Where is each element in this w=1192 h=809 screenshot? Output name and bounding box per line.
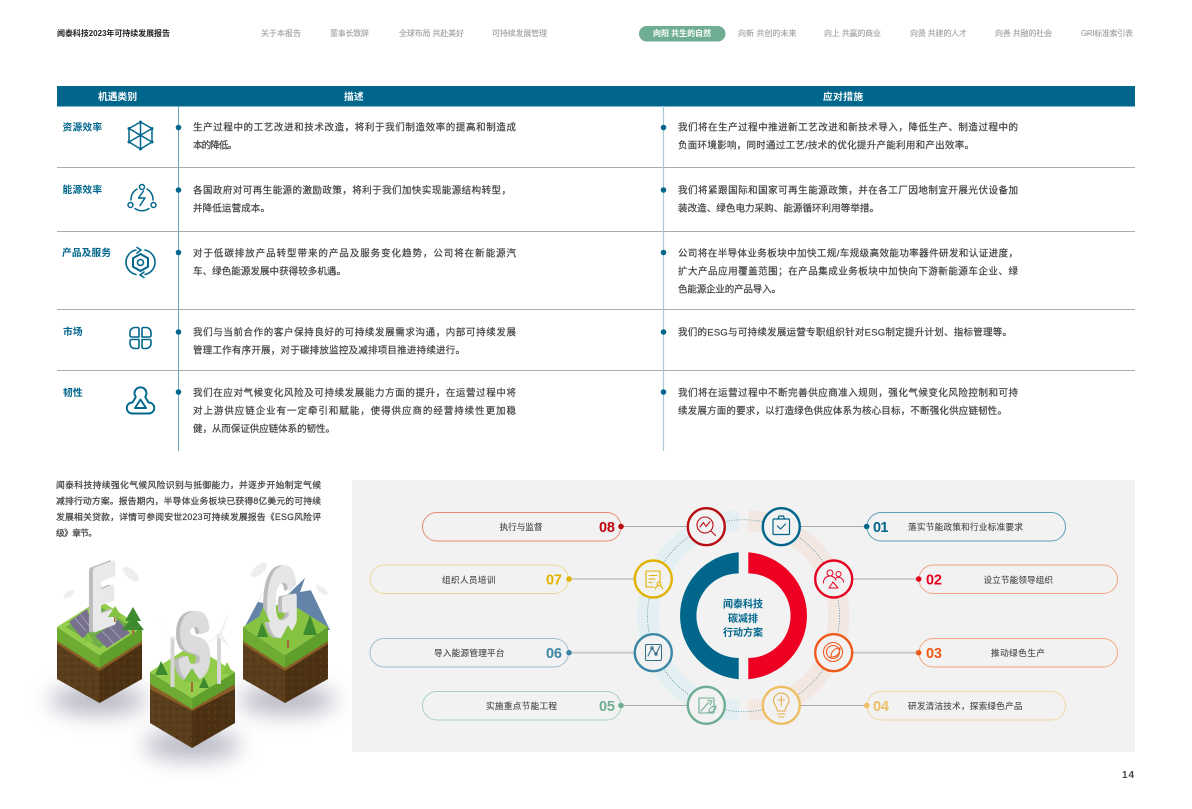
table header row: [57, 86, 1135, 106]
item 08: implementation and supervision: 08: [599, 520, 615, 536]
row: products and services: 对于低碳排放产品转型带来的产品及服务变化趋势，公司将在新能源汽: [193, 248, 516, 260]
icon: light bulb: [774, 693, 789, 717]
row: products and services: 色能源企业的产品导入。: [678, 284, 781, 296]
item 01: policy: 01: [873, 520, 888, 536]
row: energy efficiency: 我们将紧跟国际和国家可再生能源政策，并在各工厂因地制宜开展光伏设备加: [678, 184, 1018, 196]
row: resource efficiency: 我们将在生产过程中推进新工艺改进和新技术导入，降低生产、制造过程中的: [678, 122, 1018, 134]
navigation bar: 向贤 共建的人才: [910, 28, 967, 38]
block S: [144, 595, 240, 759]
ring: outer light band: [648, 520, 840, 712]
row: energy efficiency: [62, 183, 1018, 214]
icon: wrench with leaf: [699, 698, 716, 713]
row: resource efficiency: [62, 120, 1018, 152]
icon: gear with leaf: [824, 642, 842, 662]
navigation bar: 可持续发展管理: [492, 28, 547, 38]
chart: central donut: 行动方案: [723, 626, 763, 639]
item 01: policy: 落实节能政策和行业标准要求: [908, 521, 1023, 532]
row: products and services: [62, 246, 1018, 296]
row: resilience: 对上游供应链企业有一定牵引和赋能，使得供应商的经营持续性更加稳: [193, 405, 516, 417]
table header row: 机遇类别: [98, 90, 137, 103]
row: resource efficiency: 生产过程中的工艺改进和技术改造，将利于我们制造效率的提高和制造成: [193, 122, 516, 134]
navigation bar: 全球布局 共赴美好: [399, 28, 464, 38]
item 07: staff training: [370, 560, 672, 598]
wind turbines: [155, 612, 230, 687]
row: products and services: 车、绿色能源发展中获得较多机遇。: [193, 266, 346, 278]
navigation bar: 关于本报告: [261, 28, 301, 38]
icon: energy cycle: [128, 184, 156, 211]
row: resilience: [63, 386, 1018, 435]
block S: S: [175, 595, 206, 697]
row: resource efficiency: 负面环境影响，同时通过工艺/技术的优化提升产能利用和产出效率。: [678, 140, 974, 152]
row: energy efficiency: 各国政府对可再生能源的激励政策，将利于我们加快实现能源结构转型，: [193, 184, 511, 196]
row: resilience: 续发展方面的要求，以打造绿色供应体系为核心目标，不断强化供应链韧性。: [678, 405, 1007, 417]
illustration: ESG isometric blocks: [50, 545, 335, 759]
item 05: key projects: [422, 687, 725, 724]
item 03: green production: [815, 634, 1118, 671]
block G: [239, 548, 335, 714]
item 02: leadership organisation: [815, 560, 1118, 598]
row: energy efficiency: 能源效率: [62, 183, 102, 196]
block G: G: [267, 548, 298, 658]
block E: [50, 545, 146, 714]
navigation bar: 董事长致辞: [330, 28, 369, 38]
item 02: leadership organisation: 02: [926, 572, 942, 588]
row: resilience: 韧性: [63, 386, 83, 399]
icon: people with recycle: [823, 570, 844, 588]
item 04: clean technology: [763, 687, 1066, 724]
row: market: 我们的ESG与可持续发展运营专职组织针对ESG制定提升计划、指标管理等。: [678, 326, 1012, 338]
text block: climate action intro: 发展相关贷款，详情可参阅安世2023可持续发展报告《ESG风险评: [56, 511, 321, 522]
item 06: energy management platform: 导入能源管理平台: [434, 647, 504, 658]
icon: document with person: [646, 571, 662, 589]
navigation bar: GRI标准索引表: [1081, 28, 1133, 38]
item 04: clean technology: 研发清洁技术，探索绿色产品: [908, 700, 1022, 711]
icon: clipboard check: [773, 516, 790, 534]
row: resource efficiency: 资源效率: [62, 120, 102, 134]
navigation bar: 向阳 共生的自然: [653, 28, 711, 38]
block G: G: [263, 548, 294, 658]
item 05: key projects: 实施重点节能工程: [486, 700, 557, 711]
icon: gear with cycle arrows: [126, 248, 155, 278]
row: products and services: 公司将在半导体业务板块中加快工规/车规级高效能功率器件研发和认证进度，: [678, 248, 1018, 260]
row: resource efficiency: 本的降低。: [193, 140, 237, 152]
chart: central donut: 碳减排: [728, 612, 758, 625]
item 06: energy management platform: 06: [546, 646, 562, 662]
row: products and services: 扩大产品应用覆盖范围；在产品集成业务板块中加快向下游新能源车企业、绿: [678, 266, 1018, 278]
chart: central donut: 闻泰科技: [723, 598, 763, 610]
text block: climate action intro: 闻泰科技持续强化气候风险识别与抵御能力，并逐步开始制定气候: [56, 479, 321, 490]
item 08: implementation and supervision: 执行与监督: [500, 521, 543, 532]
row: resilience: 健，从而保证供应链体系的韧性。: [193, 423, 335, 435]
row: products and services: 产品及服务: [62, 246, 111, 259]
row: market: 管理工作有序开展，对于碳排放监控及减排项目推进持续进行。: [193, 344, 465, 356]
table header row: 描述: [344, 90, 364, 103]
item 06: energy management platform: [370, 634, 672, 671]
icon: hexagon cube: [128, 120, 154, 150]
item 08: implementation and supervision: [422, 508, 725, 545]
navigation bar: 向上 共赢的商业: [824, 28, 881, 38]
row: market: 市场: [63, 325, 83, 338]
navigation bar: [261, 26, 1133, 42]
text block: climate action intro: [56, 479, 321, 538]
mountains: [243, 578, 330, 630]
text block: climate action intro: 减排行动方案。报告期内，半导体业务板块已获得8亿美元的可持续: [56, 495, 321, 506]
chart: central donut: [680, 552, 807, 679]
panel: carbon reduction action plan: [352, 480, 1135, 752]
icon: four petals grid: [130, 328, 151, 348]
navigation bar: 向善 共融的社会: [995, 28, 1052, 38]
block E: E: [92, 545, 116, 648]
item 05: key projects: 05: [599, 699, 615, 715]
block S: S: [179, 595, 210, 697]
item 02: leadership organisation: 设立节能领导组织: [984, 574, 1053, 585]
item 03: green production: 03: [926, 646, 942, 662]
row: market: 我们与当前合作的客户保持良好的可持续发展需求沟通，内部可持续发展: [193, 326, 516, 338]
item 03: green production: 推动绿色生产: [991, 647, 1045, 658]
table: opportunities: [57, 86, 1135, 451]
row: energy efficiency: 并降低运营成本。: [193, 202, 270, 214]
item 07: staff training: 07: [546, 572, 562, 588]
row: resilience: 我们将在运营过程中不断完善供应商准入规则，强化气候变化风险控制和可持: [678, 387, 1018, 399]
item 07: staff training: 组织人员培训: [442, 574, 496, 585]
row: market: [63, 325, 1012, 356]
icon: triangular knot: [127, 387, 154, 414]
icon: magnifier with trend: [697, 517, 716, 536]
item 01: policy: [763, 508, 1066, 545]
navigation bar: 向新 共创的未来: [738, 28, 796, 38]
header: report title: 闻泰科技2023年可持续发展报告: [57, 28, 170, 38]
text block: climate action intro: 级》章节。: [56, 527, 97, 538]
block E: E: [88, 545, 112, 648]
item 04: clean technology: 04: [873, 699, 889, 715]
page number: 14: [1122, 770, 1134, 781]
table header row: 应对措施: [823, 90, 863, 103]
icon: network board: [646, 644, 662, 660]
row: resilience: 我们在应对气候变化风险及可持续发展能力方面的提升，在运营过程中将: [193, 387, 516, 399]
row: energy efficiency: 装改造、绿色电力采购、能源循环利用等举措。: [678, 202, 879, 214]
